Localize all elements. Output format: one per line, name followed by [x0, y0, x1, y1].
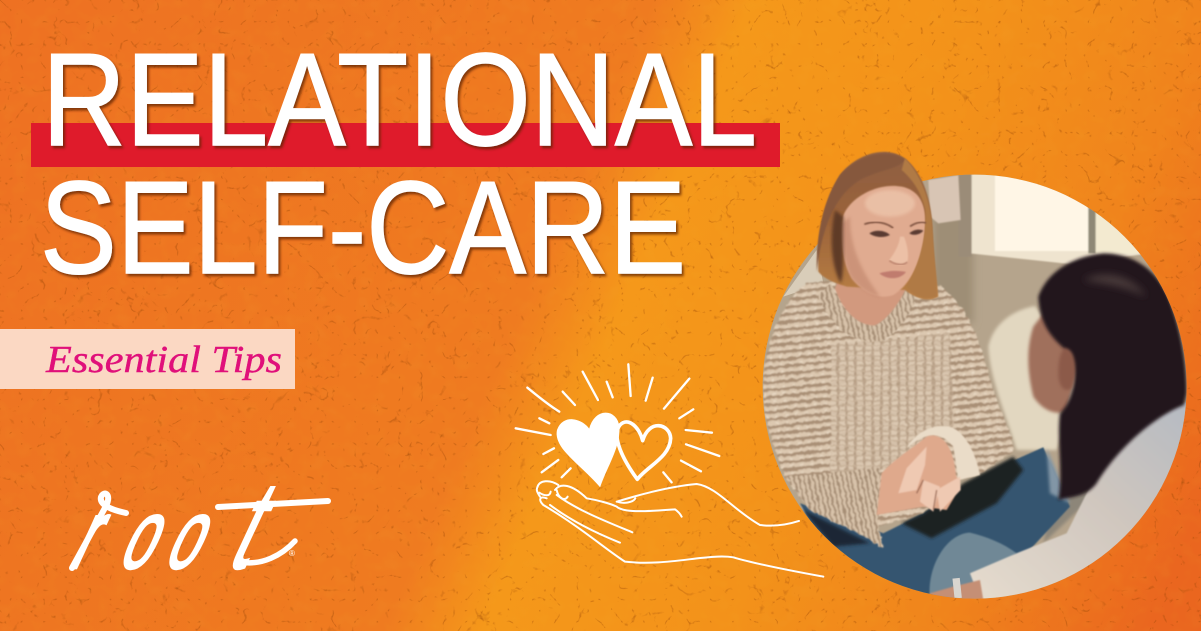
photo: clipped scene inside circle [760, 173, 1190, 603]
logo: root [55, 456, 328, 595]
ear [1058, 348, 1075, 390]
icon: open hand [537, 481, 823, 577]
sofa lower [1043, 490, 1088, 542]
logo: root: t [212, 456, 298, 595]
hair back [818, 152, 938, 299]
red highlight bar [31, 123, 780, 167]
knee of second person [930, 533, 1017, 598]
sweater: torso [763, 280, 1015, 548]
title line 1: RELATIONAL [42, 26, 757, 173]
eyes [869, 230, 923, 237]
clasped hands [877, 436, 961, 515]
logo: root: ® [289, 549, 295, 558]
neck [834, 284, 905, 326]
forehead light [865, 190, 915, 217]
nose [889, 237, 908, 265]
subtitle tag: Essential Tips [0, 329, 295, 389]
title: Relational Self-Care [40, 26, 757, 301]
lips [879, 271, 906, 278]
window with bright light [958, 173, 1150, 264]
wall shading [933, 173, 973, 323]
icon: radiating rays [516, 364, 719, 482]
blouse [970, 402, 1187, 600]
sweater collar [818, 283, 918, 342]
eyebrows [865, 222, 925, 228]
icon: filled heart [557, 413, 619, 487]
subtitle tag: Essential Tips: Essential Tips [45, 339, 282, 381]
hair [1038, 253, 1187, 500]
sweater: cuff on far sleeve [907, 426, 980, 480]
cushion [988, 306, 1083, 450]
face shadow [841, 217, 880, 297]
title line 2: SELF-CARE [40, 154, 686, 301]
hair front lock [817, 154, 905, 272]
room wall [760, 173, 1190, 603]
icon: outline heart [617, 422, 671, 479]
left wall sliver [783, 250, 823, 297]
jeans: woman [800, 447, 1070, 598]
woman head and hair rising above circle [817, 152, 938, 299]
person: child hair, shirt and face [927, 253, 1187, 600]
face [1026, 314, 1075, 415]
jeans shadow gap [902, 457, 1023, 538]
icon: hand holding two hearts [516, 364, 823, 577]
photo: two women talking in circular crop [760, 152, 1190, 603]
hand and wrist [927, 580, 983, 600]
face [841, 186, 925, 297]
logo: root: roo [58, 481, 234, 590]
hanging cloth [928, 175, 961, 223]
